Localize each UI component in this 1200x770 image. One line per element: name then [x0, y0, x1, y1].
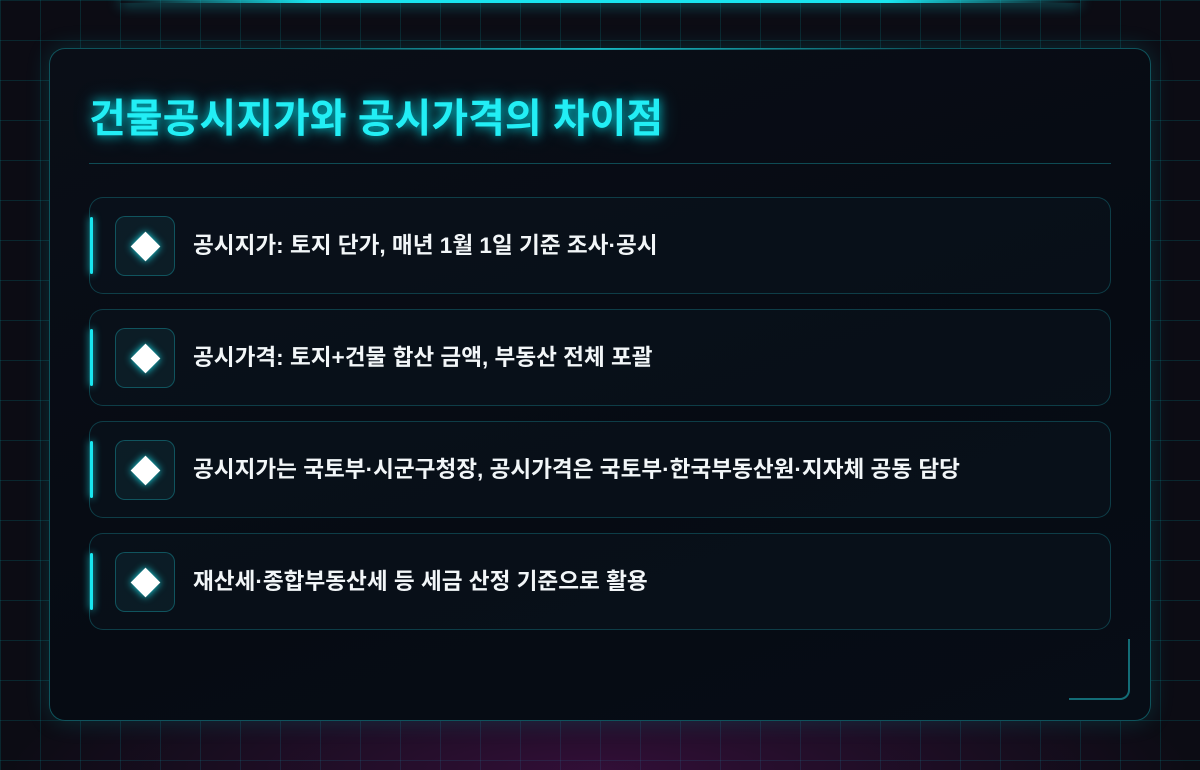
- item 4: [89, 533, 1111, 630]
- text 4: 재산세·종합부동산세 등 세금 산정 기준으로 활용: [193, 569, 648, 594]
- text 3: 공시지가는 국토부·시군구청장, 공시가격은 국토부·한국부동산원·지자체 공동 담당: [193, 457, 960, 482]
- item 1: [89, 197, 1111, 294]
- item 2: [89, 309, 1111, 406]
- icon: diamond: [115, 216, 175, 276]
- icon: diamond: [115, 552, 175, 612]
- text 1: 공시지가: 토지 단가, 매년 1월 1일 기준 조사·공시: [193, 233, 658, 258]
- icon: diamond: [115, 440, 175, 500]
- text 2: 공시가격: 토지+건물 합산 금액, 부동산 전체 포괄: [193, 345, 653, 370]
- icon: diamond: [115, 328, 175, 388]
- title: 건물공시지가와 공시가격의 차이점: [89, 97, 663, 141]
- item 3: [89, 421, 1111, 518]
